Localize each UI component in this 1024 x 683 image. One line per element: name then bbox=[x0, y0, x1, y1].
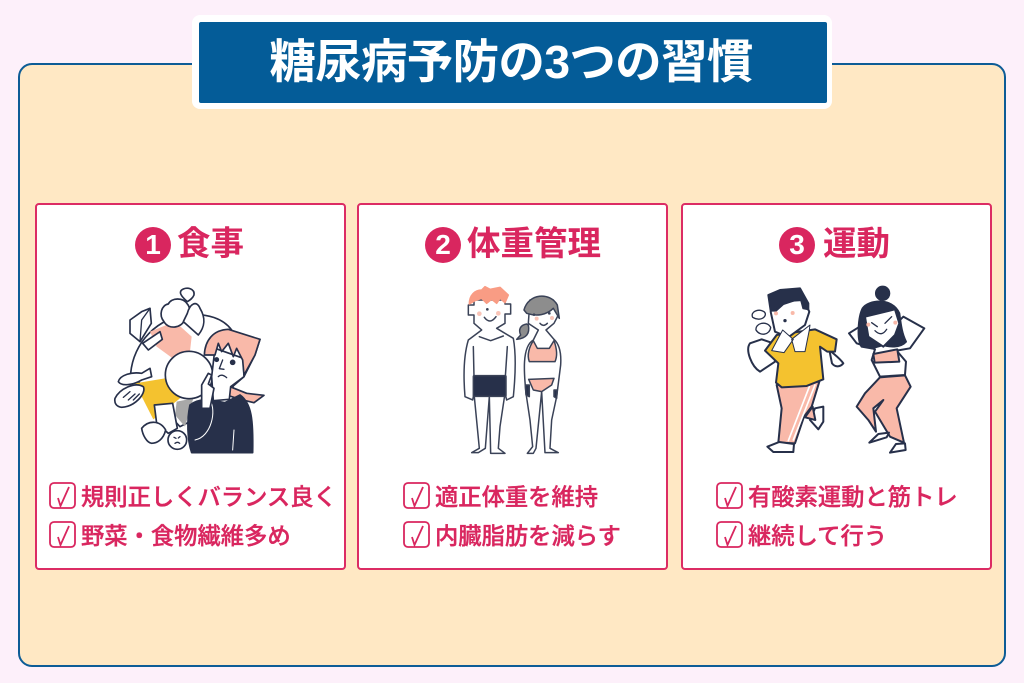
title bbox=[199, 22, 827, 103]
checklist item: aerobic and strength training bbox=[716, 482, 958, 510]
icon: man and woman standing bbox=[464, 287, 561, 453]
panel: weight management: 適正体重を維持 bbox=[435, 484, 598, 510]
checklist item: maintain weight bbox=[403, 482, 598, 510]
panel: exercise: 有酸素運動と筋トレ bbox=[748, 484, 958, 510]
panel: exercise: 継続して行う bbox=[748, 523, 887, 549]
checklist item: reduce visceral fat bbox=[403, 521, 621, 549]
icon: person thinking about food bbox=[115, 288, 264, 453]
checklist item: vegetables and fiber bbox=[49, 521, 291, 549]
heading: meal: 1 bbox=[145, 229, 161, 260]
heading: meal: 食事 bbox=[177, 226, 244, 263]
panel: weight management bbox=[357, 203, 668, 570]
panel: meal: 野菜・食物繊維多め bbox=[81, 523, 291, 549]
heading: weight management: 2 bbox=[435, 229, 451, 260]
heading: exercise bbox=[779, 226, 890, 263]
panel: exercise bbox=[681, 203, 992, 570]
checklist item: keep going bbox=[716, 521, 887, 549]
icon: man jogging and woman squatting bbox=[748, 287, 924, 453]
heading: meal bbox=[135, 226, 244, 263]
title: 糖尿病予防の3つの習慣 bbox=[269, 36, 753, 88]
panel: meal: 規則正しくバランス良く bbox=[81, 484, 337, 510]
checklist item: regular balanced meals bbox=[49, 482, 337, 510]
panel: meal bbox=[35, 203, 346, 570]
title plate bbox=[192, 15, 832, 109]
heading: weight management: 体重管理 bbox=[467, 226, 601, 263]
heading: exercise: 3 bbox=[789, 229, 805, 260]
heading: exercise: 運動 bbox=[823, 226, 890, 263]
panel: weight management: 内臓脂肪を減らす bbox=[435, 523, 621, 549]
